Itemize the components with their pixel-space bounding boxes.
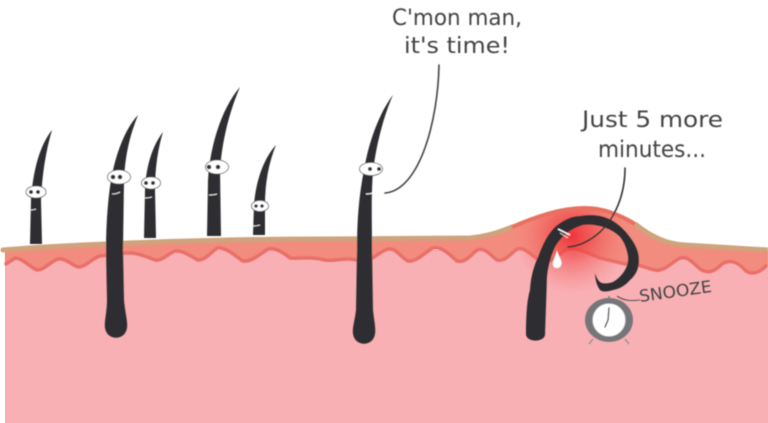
tear drop	[553, 250, 561, 268]
speech text: awake hair: C'mon man,	[392, 6, 522, 31]
speech pointer: awake hair	[385, 65, 439, 193]
hair 2	[105, 115, 138, 338]
skin surface tan line	[3, 227, 512, 250]
speech text: ingrown hair	[580, 108, 723, 163]
speech text: awake hair: it's time!	[404, 34, 510, 59]
hair 6: awake hair	[353, 95, 393, 344]
speech text: ingrown hair: Just 5 more	[580, 108, 723, 133]
inflammation glow	[524, 210, 616, 288]
skin surface, red over bump	[512, 208, 635, 227]
dermis: pink lower skin	[5, 250, 768, 423]
hair 3	[142, 132, 163, 238]
ingrown curled hair	[526, 215, 639, 341]
speech text: awake hair	[392, 6, 522, 59]
skin surface tan line, right of bump	[635, 224, 768, 250]
dark wavy skin line	[6, 248, 766, 273]
snooze label: SNOOZE	[638, 277, 713, 306]
hair 5	[252, 145, 276, 235]
speech pointer: ingrown hair	[568, 168, 625, 247]
hair 4	[206, 87, 240, 236]
hair 1	[26, 130, 52, 244]
alarm clock	[585, 296, 633, 344]
speech text: ingrown hair: minutes...	[598, 137, 706, 163]
epidermis: salmon upper skin layer	[5, 208, 768, 273]
